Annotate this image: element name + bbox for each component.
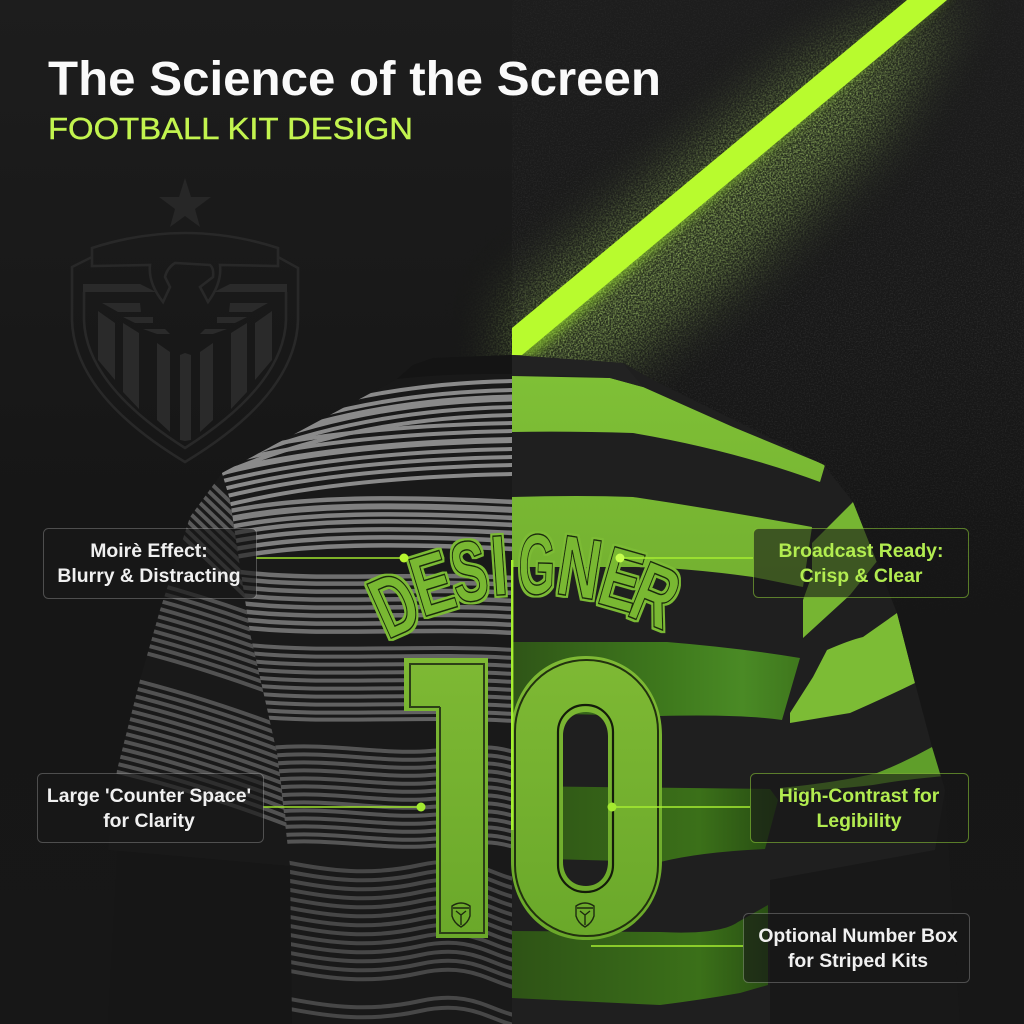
number 1 xyxy=(404,658,488,938)
name on back: DESIGNER: N xyxy=(551,516,608,618)
neon diagonal beam xyxy=(512,0,950,358)
green band: upper back xyxy=(512,496,812,587)
name on back: DESIGNER: S xyxy=(444,522,494,622)
callout: optional number box: Optional Number Box xyxy=(758,925,958,947)
callout: counter space xyxy=(38,774,426,842)
centre split line xyxy=(511,560,513,830)
callout: broadcast ready: Broadcast Ready: xyxy=(779,540,943,562)
green band: yoke xyxy=(512,376,825,482)
callout: broadcast ready: Crisp & Clear xyxy=(800,565,923,587)
callout: optional number box: for Striped Kits xyxy=(788,950,928,972)
callout: optional number box xyxy=(591,914,970,982)
callout: Moire effect: Blurry & Distracting xyxy=(57,565,241,587)
collar right xyxy=(512,355,643,387)
green band: hem xyxy=(512,905,768,1005)
callout: high contrast xyxy=(608,774,968,842)
number 0 xyxy=(511,656,662,940)
sleeve stripes xyxy=(116,484,286,826)
name on back: DESIGNER xyxy=(355,515,693,657)
icon: small crest xyxy=(576,903,594,927)
body stripes xyxy=(215,381,514,1024)
faded club crest with star and eagle xyxy=(72,178,298,462)
shirt left half: moire stripes xyxy=(100,355,514,1024)
name on back: DESIGNER: I xyxy=(488,516,511,614)
name on back: DESIGNER: E xyxy=(590,527,654,631)
name on back: DESIGNER: R xyxy=(618,542,693,648)
name on back: DESIGNER: G xyxy=(517,515,557,613)
title: The Science of the Screen xyxy=(48,53,661,106)
green band: mid back xyxy=(512,642,800,720)
name on back: DESIGNER: D xyxy=(355,551,434,657)
subtitle: FOOTBALL KIT DESIGN xyxy=(48,112,413,146)
callout: counter space: Large 'Counter Space' xyxy=(47,785,251,807)
callout: Moire effect xyxy=(44,528,408,598)
callout: broadcast ready xyxy=(616,528,968,598)
callout: high contrast: High-Contrast for xyxy=(779,785,940,807)
callout: Moire effect: Moirè Effect: xyxy=(90,540,208,562)
callout: high contrast: Legibility xyxy=(816,810,902,832)
lower sleeve band xyxy=(780,747,945,792)
green band: lower back xyxy=(563,786,778,862)
callout: counter space: for Clarity xyxy=(103,810,195,832)
sleeve band xyxy=(790,613,915,723)
name on back: DESIGNER: E xyxy=(400,531,465,635)
arms in shadow xyxy=(108,790,960,1024)
collar left xyxy=(397,355,512,379)
shirt right half: bold broadcast stripes xyxy=(512,355,945,1024)
background xyxy=(470,0,1024,538)
sleeve chevron xyxy=(803,502,878,638)
icon: small crest xyxy=(452,903,470,927)
